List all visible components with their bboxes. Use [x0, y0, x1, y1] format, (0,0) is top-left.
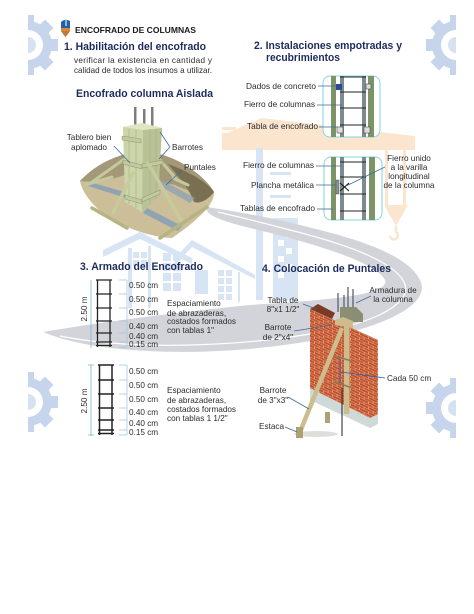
labels: diagram 2: Fierro de columnas [243, 161, 314, 170]
labels: diagram 2: longitudinal [388, 172, 430, 181]
labels: wall and struts [258, 286, 431, 432]
chart: ladder spacing, 1 inch boards: 0.50 cm [129, 281, 158, 290]
background crane [222, 118, 415, 239]
heading: encofrado columna aislada: Encofrado columna Aislada [76, 88, 213, 100]
labels: isolated column [67, 132, 216, 185]
labels: diagram 1: Fierro de columnas [244, 100, 315, 109]
labels: diagram 2: de la columna [384, 181, 435, 190]
ground shadow [294, 431, 338, 437]
labels: isolated column: Tablero bien [67, 133, 112, 142]
background buildings [103, 148, 298, 308]
background road [43, 207, 422, 352]
chart: ladder spacing, 1 inch boards: 0.50 cm [129, 308, 158, 317]
chart: ladder spacing, 1 1/2 inch boards: 0.50 cm [129, 381, 158, 390]
text block: spacing 1 inch: Espaciamiento [167, 299, 221, 308]
heading 4: 4. Colocación de Puntales [262, 263, 391, 275]
panel: isolated column formwork illustration [80, 107, 214, 238]
labels: wall and struts: Estaca [259, 422, 284, 431]
chart: ladder spacing, 1 inch boards [80, 280, 158, 349]
labels: wall and struts: 8"x1 1/2" [267, 305, 299, 314]
icon: pencil and buildings logo [61, 20, 70, 37]
text block: spacing 1 1/2 inch: Espaciamiento [167, 386, 221, 395]
text block: spacing 1 inch: con tablas 1" [167, 326, 214, 335]
labels: diagram 2: a la varilla [391, 163, 428, 172]
labels: diagram 2: Tablas de encofrado [240, 204, 315, 213]
text block: spacing 1 inch [167, 299, 236, 335]
heading 1: 1. Habilitación del encofrado [64, 41, 207, 53]
text block: spacing 1 inch: costados formados [167, 317, 236, 326]
labels: wall and struts: Cada 50 cm [387, 374, 431, 383]
heading 3: 3. Armado del Encofrado [80, 261, 204, 273]
wall base [310, 388, 378, 428]
text block: spacing 1 1/2 inch: con tablas 1 1/2" [167, 414, 228, 423]
rebars [338, 287, 353, 312]
text block: spacing 1 inch: de abrazaderas, [167, 309, 226, 318]
labels: diagram 2 [240, 154, 435, 213]
column clamps [122, 136, 163, 204]
chart: ladder spacing, 1 1/2 inch boards: 0.40 cm [129, 419, 158, 428]
chart: ladder spacing, 1 1/2 inch boards: 0.50 cm [129, 395, 158, 404]
chart: ladder spacing, 1 inch boards: 0.40 cm [129, 332, 158, 341]
column top box [340, 307, 363, 322]
column [123, 123, 162, 212]
panel: embedded installation diagram 1 [323, 76, 380, 137]
braces [333, 356, 352, 388]
labels: wall and struts: Barrote [265, 323, 292, 332]
ground [80, 152, 214, 238]
chart: ladder spacing, 1 1/2 inch boards: 2.50 m [80, 388, 89, 414]
text block: intro: verificar la existencia en cantidad y [74, 56, 213, 65]
chart: ladder spacing, 1 inch boards: 0.50 cm [129, 295, 158, 304]
labels: isolated column: Barrotes [172, 143, 203, 152]
labels: isolated column: Puntales [184, 163, 216, 172]
panel: embedded installation diagram 2 [324, 157, 382, 220]
chart: ladder spacing, 1 inch boards: 0.15 cm [129, 340, 158, 349]
chart: ladder spacing, 1 1/2 inch boards [80, 365, 158, 437]
labels: wall and struts: Tabla de [268, 296, 299, 305]
chart: ladder spacing, 1 1/2 inch boards: 0.50 cm [129, 367, 158, 376]
front struts [113, 163, 182, 222]
long strut [300, 328, 342, 432]
heading 2: recubrimientos [266, 52, 340, 64]
text block: intro [74, 56, 213, 75]
labels: diagram 1: Tabla de encofrado [247, 122, 318, 131]
text block: spacing 1 1/2 inch: costados formados [167, 405, 236, 414]
heading 2: 2. Instalaciones empotradas y [254, 40, 402, 52]
labels: wall and struts: la columna [373, 295, 413, 304]
text block: intro: calidad de todos los insumos a utilizar. [74, 66, 212, 75]
labels: wall and struts: Barrote [260, 386, 287, 395]
labels: wall and struts: de 2"x4" [263, 333, 293, 342]
base boards [92, 207, 207, 238]
steel rod [341, 388, 343, 436]
text block: spacing 1 1/2 inch [167, 386, 236, 423]
text block: spacing 1 1/2 inch: de abrazaderas, [167, 396, 226, 405]
labels: diagram 2: Plancha metálica [251, 181, 314, 190]
chart: ladder spacing, 1 1/2 inch boards: 0.15 cm [129, 428, 158, 437]
heading 2 [254, 40, 402, 64]
rebars [134, 107, 154, 127]
stakes [296, 427, 303, 438]
labels: diagram 2: Fierro unido [387, 154, 431, 163]
wall cap [310, 304, 335, 319]
chart: ladder spacing, 1 inch boards: 0.40 cm [129, 322, 158, 331]
chart: ladder spacing, 1 inch boards: 2.50 m [80, 296, 89, 322]
labels: isolated column: aplomado [71, 143, 107, 152]
background gears [0, 15, 474, 438]
chart: ladder spacing, 1 1/2 inch boards: 0.40 cm [129, 408, 158, 417]
column post [344, 326, 350, 414]
labels: wall and struts: Armadura de [369, 286, 417, 295]
labels: wall and struts: de 3"x3" [258, 396, 288, 405]
labels: diagram 1 [244, 82, 342, 131]
brick wall [310, 309, 378, 418]
title: ENCOFRADO DE COLUMNAS [75, 25, 196, 35]
rear struts [85, 160, 188, 185]
panel: wall with shoring struts illustration [294, 287, 378, 438]
labels: diagram 1: Dados de concreto [246, 82, 316, 91]
